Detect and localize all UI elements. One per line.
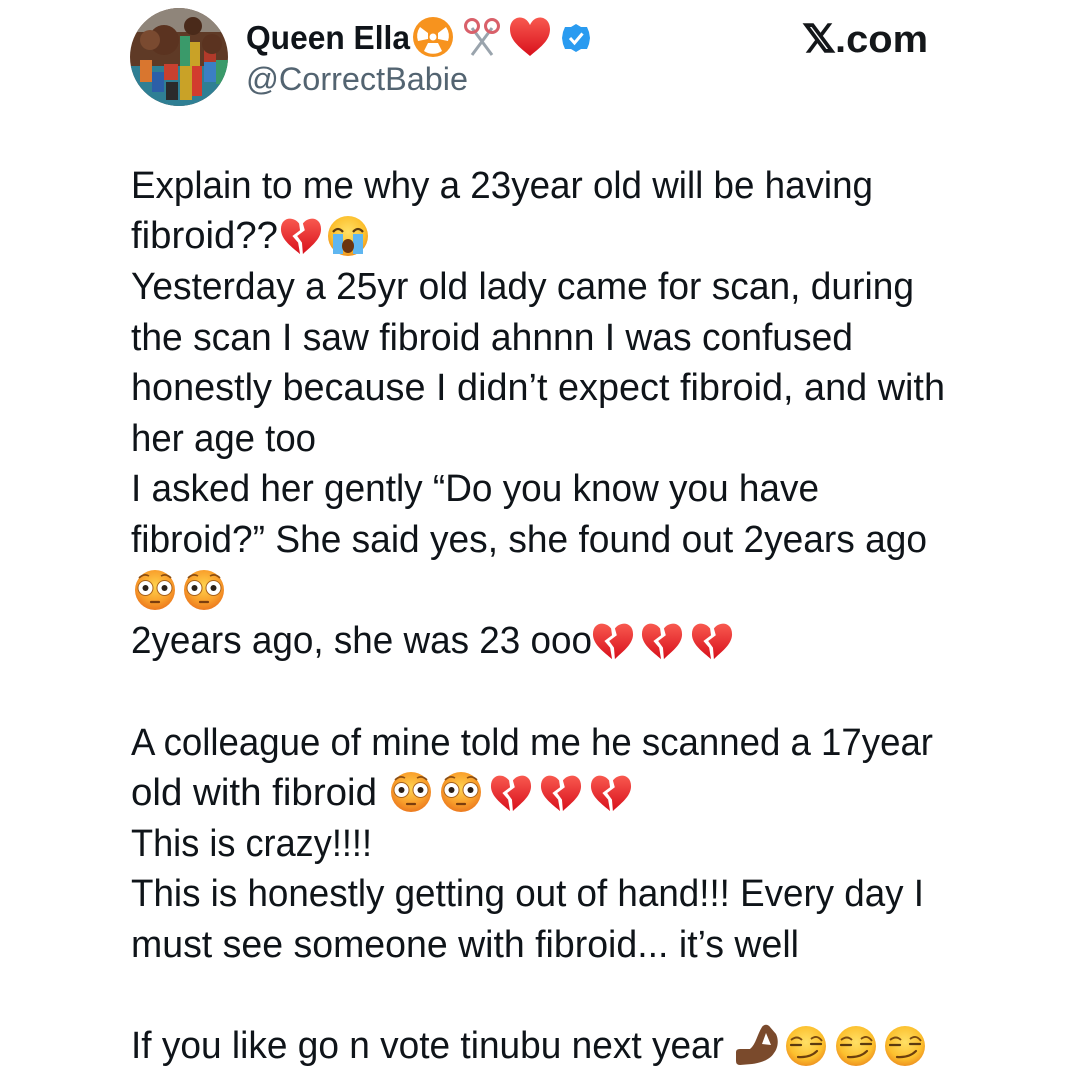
- icons: flushed faces, line 9: [135, 570, 224, 610]
- icons: flushed faces and broken hearts, line 12: [391, 772, 631, 812]
- tweet body text: A colleague of mine told me he scanned a 17year: [131, 722, 933, 764]
- display name: Queen Ella: [246, 19, 411, 56]
- X.com logo: 𝕏: [803, 17, 835, 61]
- tweet body text: Yesterday a 25yr old lady came for scan, during: [131, 266, 914, 308]
- icon: broken heart, line 2: [281, 219, 321, 254]
- icon: pinching hand: [736, 1025, 778, 1065]
- tweet body text: This is crazy!!!!: [131, 823, 372, 865]
- avatar: [130, 8, 228, 106]
- handle: @CorrectBabie: [246, 61, 468, 97]
- icons: smirking faces: [786, 1026, 925, 1066]
- tweet body text: Explain to me why a 23year old will be having: [131, 165, 873, 207]
- tweet body text: [131, 165, 945, 1067]
- tweet body text: fibroid?” She said yes, she found out 2years ago: [131, 519, 927, 561]
- tweet body text: old with fibroid: [131, 772, 377, 814]
- icon: loudly crying face: [328, 216, 368, 256]
- tweet body text: I asked her gently “Do you know you have: [131, 468, 819, 510]
- tweet body text: her age too: [131, 418, 316, 460]
- X.com logo: [803, 17, 928, 61]
- tweet body text: This is honestly getting out of hand!!! Every day I: [131, 873, 924, 915]
- tweet body text: must see someone with fibroid... it’s well: [131, 924, 799, 966]
- icon: red heart: [510, 17, 550, 56]
- tweet body text: honestly because I didn’t expect fibroid, and with: [131, 367, 945, 409]
- tweet body text: If you like go n vote tinubu next year: [131, 1025, 724, 1067]
- X.com logo: .com: [835, 19, 928, 61]
- icons: broken hearts, line 10: [593, 624, 732, 659]
- tweet body text: the scan I saw fibroid ahnnn I was confused: [131, 317, 853, 359]
- tweet body text: 2years ago, she was 23 ooo: [131, 620, 592, 662]
- icon: radioactive emoji: [413, 17, 453, 57]
- icon: verified badge: [562, 24, 590, 52]
- icon: scissors emoji: [466, 20, 498, 55]
- tweet body text: fibroid??: [131, 215, 278, 257]
